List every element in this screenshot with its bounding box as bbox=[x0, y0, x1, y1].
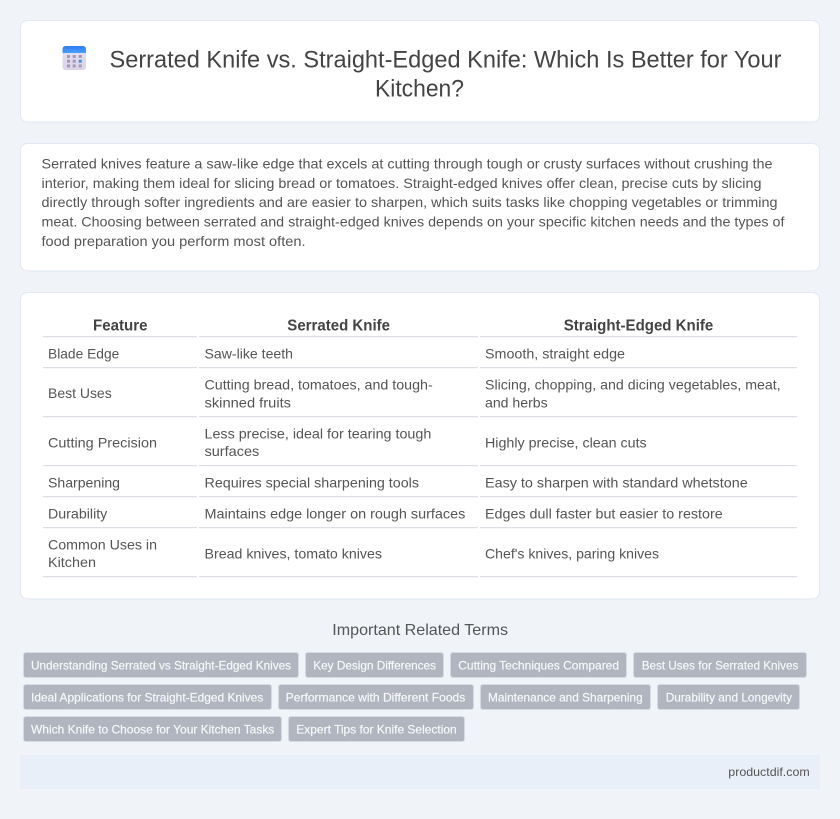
row: common uses in kitchen: Common Uses in bbox=[48, 536, 157, 552]
row: blade edge bbox=[43, 345, 797, 368]
text block: description: directly through softer ingredients and are easier to sharpen, which suits tasks like chopping vegetables or trimming bbox=[42, 194, 777, 210]
text block: description bbox=[42, 155, 785, 249]
row: durability: Durability bbox=[48, 505, 107, 521]
icon: calendar bbox=[62, 46, 86, 70]
heading: important related terms: Important Related Terms bbox=[332, 622, 508, 639]
table header row: Serrated Knife bbox=[287, 318, 390, 335]
row: blade edge: Smooth, straight edge bbox=[485, 345, 625, 361]
tags: related terms: Expert Tips for Knife Selection bbox=[296, 722, 457, 736]
title: Serrated Knife vs. Straight-Edged Knife: Which Is Better for Your bbox=[110, 46, 782, 74]
row: cutting precision: Highly precise, clean cuts bbox=[485, 434, 647, 450]
table header row: Straight-Edged Knife bbox=[564, 318, 713, 335]
table header row: Feature bbox=[93, 318, 148, 335]
text block: description: Serrated knives feature a saw-like edge that excels at cutting through tough or crusty surfaces without crushing the bbox=[42, 155, 773, 171]
tags: related terms: Maintenance and Sharpening bbox=[488, 690, 643, 704]
row: sharpening bbox=[43, 474, 797, 497]
row: best uses bbox=[43, 376, 797, 417]
row: best uses: Best Uses bbox=[48, 385, 112, 401]
row: sharpening: Sharpening bbox=[48, 474, 120, 490]
table header row bbox=[43, 318, 797, 337]
row: cutting precision bbox=[43, 425, 797, 466]
row: blade edge: Saw-like teeth bbox=[204, 345, 293, 361]
row: best uses: and herbs bbox=[485, 394, 548, 410]
tags: related terms: Performance with Different Foods bbox=[286, 690, 465, 704]
row: best uses: Cutting bread, tomatoes, and tough- bbox=[204, 376, 433, 392]
tags: related terms: Cutting Techniques Compared bbox=[458, 658, 619, 672]
panel: comparison table bbox=[20, 292, 820, 599]
footer bbox=[20, 755, 820, 789]
row: sharpening: Requires special sharpening tools bbox=[204, 474, 419, 490]
tags: related terms bbox=[24, 652, 806, 742]
row: sharpening: Easy to sharpen with standard whetstone bbox=[485, 474, 748, 490]
title bbox=[110, 46, 782, 103]
row: cutting precision: Less precise, ideal for tearing tough bbox=[204, 425, 431, 441]
row: best uses: skinned fruits bbox=[204, 394, 291, 410]
text block: description: meat. Choosing between serrated and straight-edged knives depends on your specific kitchen needs and the types of bbox=[42, 214, 785, 230]
row: cutting precision: surfaces bbox=[204, 443, 259, 459]
row: common uses in kitchen: Bread knives, tomato knives bbox=[204, 545, 382, 561]
text block: description: interior, making them ideal for slicing bread or tomatoes. Straight-edged knives offer clean, precise cuts by slicing bbox=[42, 175, 762, 191]
panel: description bbox=[20, 144, 820, 271]
row: durability: Maintains edge longer on rough surfaces bbox=[204, 505, 465, 521]
tags: related terms: Key Design Differences bbox=[313, 658, 436, 672]
tags: related terms: Which Knife to Choose for Your Kitchen Tasks bbox=[31, 722, 274, 736]
row: blade edge: Blade Edge bbox=[48, 345, 119, 361]
row: common uses in kitchen: Kitchen bbox=[48, 554, 96, 570]
tags: related terms: Ideal Applications for Straight-Edged Knives bbox=[31, 690, 263, 704]
row: best uses: Slicing, chopping, and dicing vegetables, meat, bbox=[485, 376, 781, 392]
footer: productdif.com bbox=[728, 765, 810, 779]
row: durability bbox=[43, 505, 797, 528]
row: durability: Edges dull faster but easier to restore bbox=[485, 505, 723, 521]
panel: header bbox=[20, 20, 820, 122]
text block: description: food preparation you perform most often. bbox=[42, 233, 306, 249]
tags: related terms: Durability and Longevity bbox=[666, 690, 792, 704]
row: common uses in kitchen: Chef's knives, paring knives bbox=[485, 545, 659, 561]
tags: related terms: Best Uses for Serrated Knives bbox=[642, 658, 798, 672]
title: Kitchen? bbox=[375, 76, 464, 103]
row: cutting precision: Cutting Precision bbox=[48, 434, 157, 450]
row: common uses in kitchen bbox=[43, 536, 797, 577]
tags: related terms: Understanding Serrated vs Straight-Edged Knives bbox=[31, 658, 291, 672]
